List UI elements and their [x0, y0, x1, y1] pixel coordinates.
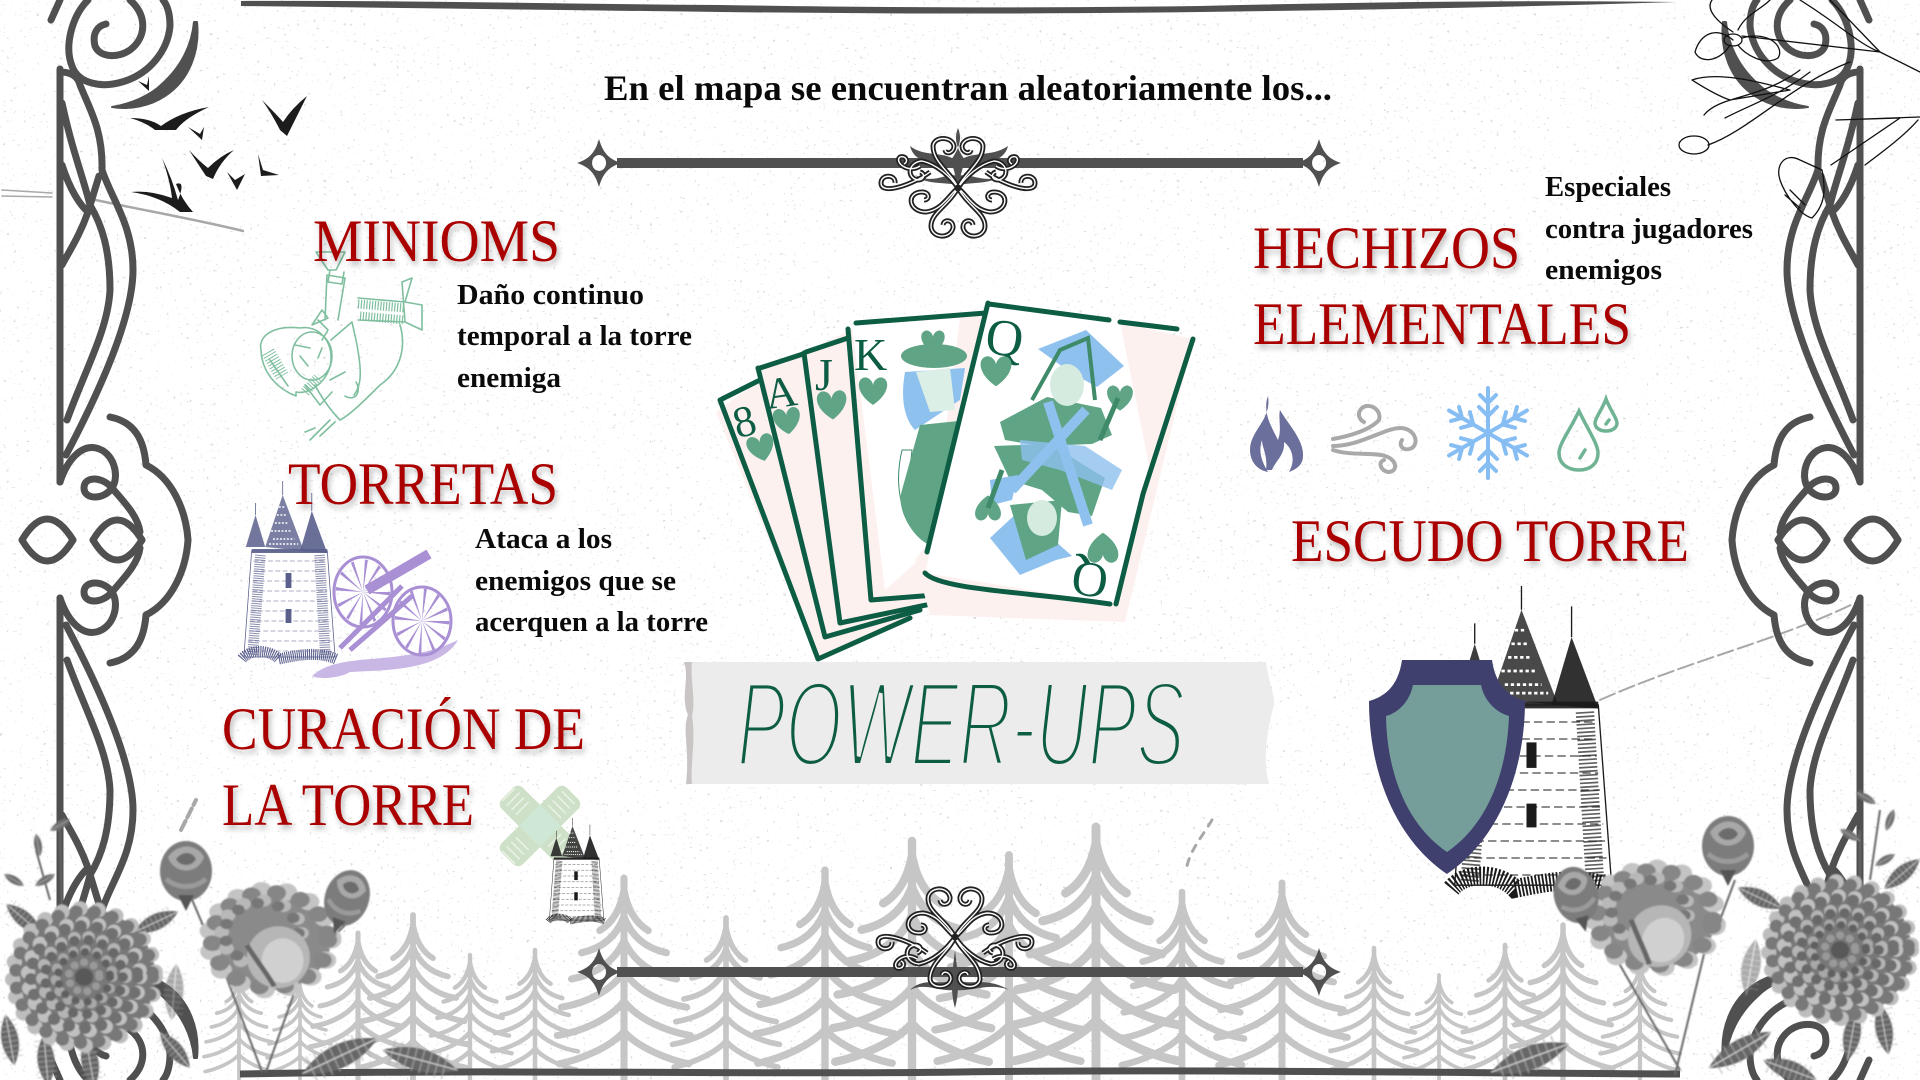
illustration: castle tower [1451, 586, 1613, 889]
description: minioms: enemiga [457, 363, 561, 394]
scratches [2, 190, 1857, 870]
top divider [577, 128, 1341, 236]
description: torretas: Ataca a los [475, 524, 612, 555]
icon: wind [1333, 406, 1416, 472]
bottom divider [577, 889, 1341, 1008]
card: jack of hearts [804, 330, 950, 623]
illustration: blue tower [242, 481, 336, 659]
description: minioms: temporal a la torre [457, 321, 692, 352]
banner: torn paper [684, 662, 1274, 784]
heading: hechizos elementales: HECHIZOS [1253, 215, 1520, 281]
card: queen of hearts: Q [1068, 550, 1112, 611]
description: hechizos [1545, 172, 1753, 286]
trees [204, 827, 1680, 1080]
frame: right [1722, 0, 1898, 1080]
card: ace of hearts: A [762, 366, 800, 419]
panel: escudo torre [1291, 508, 1689, 889]
icon: snowflake [1445, 388, 1531, 478]
frame: left [22, 0, 198, 1080]
flowers: bottom left [0, 816, 461, 1080]
panel: curación de la torre [222, 696, 604, 921]
card: queen of hearts: Q [982, 308, 1027, 370]
heading: minioms: MINIOMS [313, 208, 560, 274]
icon: fire [1250, 396, 1303, 472]
description: hechizos: contra jugadores [1545, 214, 1753, 245]
description: torretas [475, 524, 708, 638]
heading: hechizos elementales [1253, 215, 1631, 357]
heading: torretas: TORRETAS [288, 451, 558, 517]
title: power-ups: POWER-UPS [737, 656, 1185, 792]
icon: shield [1369, 660, 1525, 874]
card: king of hearts: K [854, 329, 887, 380]
illustration: small tower [548, 818, 604, 921]
card: 8 of hearts [716, 381, 915, 659]
description: minioms: Daño continuo [457, 280, 644, 311]
panel: title banner [684, 656, 1274, 792]
panel: hechizos elementales [1250, 172, 1753, 478]
heading: escudo torre: ESCUDO TORRE [1291, 508, 1689, 574]
heading: curación: CURACIÓN DE [222, 696, 585, 762]
description: minioms [457, 280, 692, 394]
illustration: purple cannon [312, 554, 458, 678]
banner: left torn edge [684, 662, 693, 784]
panel: torretas [242, 451, 708, 678]
card: 8 of hearts: 8 [727, 395, 761, 448]
birds [130, 76, 307, 212]
floral sketch: top right [1679, 0, 1920, 218]
card: king of hearts [848, 313, 1000, 600]
frame: top rule [241, 1, 1677, 14]
heading: hechizos elementales: ELEMENTALES [1253, 291, 1631, 357]
card: ace of hearts [758, 352, 925, 637]
flowers: bottom right [1487, 789, 1920, 1080]
card: queen of hearts [915, 303, 1193, 622]
panel: playing cards [716, 303, 1193, 659]
header text: En el mapa se encuentran aleatoriamente los... [604, 68, 1332, 108]
frame: bottom rule [240, 1071, 1680, 1074]
icon: bandage [497, 783, 583, 869]
panel: minioms [261, 208, 692, 440]
icon: water drops [1559, 399, 1617, 470]
description: hechizos: Especiales [1545, 172, 1671, 203]
description: hechizos: enemigos [1545, 255, 1662, 286]
description: torretas: acerquen a la torre [475, 607, 708, 638]
heading: curación: LA TORRE [222, 772, 474, 838]
card: jack of hearts: J [815, 349, 833, 400]
illustration: jester figure [261, 252, 422, 440]
description: torretas: enemigos que se [475, 566, 676, 597]
heading: curación [222, 696, 585, 838]
